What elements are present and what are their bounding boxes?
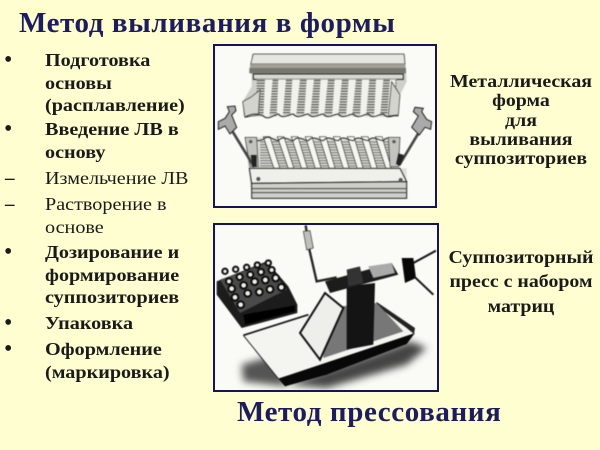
heading: pressing method: Метод прессования (237, 396, 501, 428)
step: base preparation: основы (45, 73, 112, 93)
step: packaging: • (4, 310, 12, 336)
cast shadows (242, 341, 427, 388)
sub-step: dissolving: Растворение в (45, 194, 167, 214)
step: base preparation: (расплавление) (45, 95, 185, 115)
step: introducing the drug: основу (45, 142, 106, 162)
step: labelling: Оформление (45, 339, 162, 359)
sub-step: grinding: Измельчение ЛВ (45, 168, 188, 188)
caption: suppository press: пресс с набором (449, 271, 593, 291)
step: dosing and forming: Дозирование и (45, 242, 179, 262)
left clamp screw (218, 106, 257, 167)
upper half of mould (243, 54, 407, 118)
step: labelling: • (4, 336, 12, 362)
step: base preparation: Подготовка (45, 50, 150, 70)
sub-step: dissolving (4, 194, 167, 237)
caption: suppository press (449, 247, 593, 316)
caption: suppository press: матриц (488, 296, 554, 316)
title: casting method: Метод выливания в формы (19, 7, 395, 39)
matrix block with holes (217, 260, 297, 328)
caption: metal mould: форма (492, 90, 550, 110)
press body and stand (300, 251, 436, 360)
step: packaging: Упаковка (45, 313, 133, 333)
lower half of mould (245, 137, 407, 198)
panel: metal suppository mould image (213, 44, 437, 208)
sub-step: dissolving: – (5, 194, 14, 215)
step: packaging (4, 310, 133, 336)
caption: metal mould: суппозиториев (455, 148, 587, 168)
step: dosing and forming (4, 239, 179, 307)
step: dosing and forming: • (4, 239, 12, 265)
caption: metal mould: для (505, 110, 537, 130)
tray (243, 302, 415, 386)
step: introducing the drug: Введение ЛВ в (45, 119, 179, 139)
caption: metal mould: выливания (469, 129, 573, 149)
bulleted list of process steps (4, 47, 188, 382)
press lever with syringe (303, 225, 337, 281)
sub-step: grinding: – (5, 168, 14, 189)
sub-step: dissolving: основе (45, 217, 104, 237)
step: base preparation (4, 47, 185, 115)
panel: suppository press image (213, 223, 439, 392)
caption: metal mould (450, 71, 592, 168)
step: labelling: (маркировка) (45, 362, 170, 382)
step: dosing and forming: формирование (45, 265, 179, 285)
step: introducing the drug: • (4, 116, 12, 142)
step: base preparation: • (4, 47, 12, 73)
step: labelling (4, 336, 170, 382)
right clamp screw (396, 107, 432, 166)
caption: metal mould: Металлическая (450, 71, 592, 91)
step: dosing and forming: суппозиториев (45, 287, 179, 307)
caption: suppository press: Суппозиторный (449, 247, 593, 267)
step: introducing the drug (4, 116, 179, 162)
